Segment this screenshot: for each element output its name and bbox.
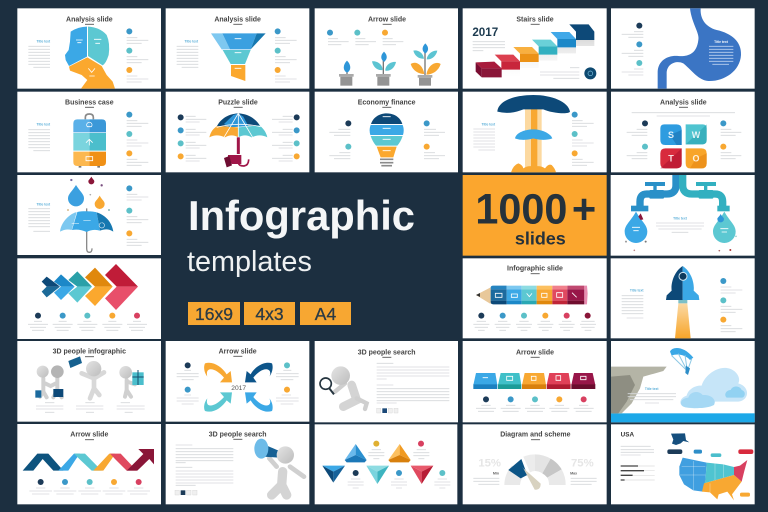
panel: SWOT analysis slide (611, 92, 755, 172)
SWOT chart: S (668, 130, 674, 140)
plus: + (572, 185, 596, 232)
left bullets (178, 114, 206, 161)
panel: diagram and scheme (463, 424, 607, 504)
bullets (622, 23, 643, 75)
format badges: A4 (315, 304, 336, 324)
text block: Title text (185, 39, 199, 43)
panel: puzzle slide (166, 92, 309, 172)
title: Stairs slide (516, 16, 554, 23)
title: 3D people search (358, 349, 416, 356)
subheading: templates: templates (187, 246, 312, 278)
text block: Title text (630, 289, 644, 293)
right bullets (272, 114, 300, 161)
SWOT chart: W (692, 130, 701, 140)
text block (28, 39, 51, 67)
umbrella (60, 208, 113, 252)
panel: mushroom slide (463, 92, 607, 172)
bullets (473, 313, 596, 330)
funnel chart (211, 33, 266, 81)
bullets (177, 362, 299, 404)
bullets (275, 28, 297, 82)
title: Infographic slide (507, 266, 563, 273)
panel: analysis slide head (17, 8, 161, 89)
drops (67, 177, 110, 211)
pagination (377, 408, 398, 413)
center year: 2017 (231, 385, 246, 392)
title: Arrow slide (368, 16, 406, 23)
SWOT chart (660, 124, 707, 168)
panel: parachute and clouds (611, 341, 755, 422)
icon: Alaska (671, 433, 689, 445)
title: Arrow slide (219, 348, 257, 355)
text block: Title text (37, 202, 51, 206)
text block: Title text (714, 40, 729, 44)
title: Puzzle slide (218, 100, 258, 107)
SWOT chart: T (668, 153, 674, 163)
panel: zigzag arrow (17, 424, 161, 504)
panel: pencil infographic (463, 258, 607, 338)
min label: Min (493, 471, 499, 475)
text block (622, 289, 644, 318)
SWOT chart: O (692, 153, 699, 163)
format badges: 16x9 (195, 304, 233, 324)
head chart (65, 27, 115, 89)
icon: blue card (68, 356, 82, 368)
text block (28, 202, 51, 231)
panel: triangles (315, 424, 457, 504)
title: 3D people infographic (53, 349, 126, 356)
text block (621, 446, 654, 455)
panel: 3D people infographic (17, 341, 161, 422)
panel: five tab arrows (463, 341, 607, 422)
bullets (572, 112, 594, 165)
plant small (339, 61, 354, 86)
panel: arrow slide plants (315, 8, 458, 89)
handshake figures (35, 365, 64, 398)
umbrella puzzle (209, 113, 267, 167)
panel: umbrella and drops (17, 175, 161, 255)
left percent: 15% (478, 458, 501, 470)
bottom band (611, 413, 755, 422)
title: Business case (65, 100, 114, 107)
title: Analysis slide (660, 100, 707, 107)
clouds (680, 368, 747, 408)
text block: Title text (482, 123, 496, 127)
plant medium (372, 52, 396, 86)
pagination (175, 490, 197, 495)
intro text (632, 113, 735, 116)
right percent: 75% (571, 458, 594, 470)
format badges: 4x3 (255, 304, 284, 324)
right tap (683, 175, 730, 211)
min label (473, 471, 499, 484)
panel: taps and drops (611, 175, 755, 256)
max label: Max (570, 471, 577, 475)
heading: Infographic: Infographic (188, 192, 415, 239)
text block: Title text (645, 387, 659, 391)
panel: business case (17, 92, 161, 172)
bullets (29, 479, 150, 494)
panel: USA map (611, 424, 755, 504)
panel: stomach slide (611, 8, 755, 89)
arrows chart (204, 363, 273, 412)
drops (625, 212, 737, 251)
zigzag chart (23, 449, 154, 471)
text block (473, 42, 505, 51)
USA map (679, 458, 747, 500)
panel: rocket slide (611, 258, 755, 338)
text block: Title text (37, 123, 51, 127)
panel: 3D people search megaphone (166, 424, 309, 504)
captions (36, 403, 145, 412)
heading: USA (621, 432, 634, 439)
triangles chart (322, 444, 433, 484)
text block (709, 40, 733, 64)
title: Diagram and scheme (500, 432, 571, 439)
figure with magnifier (320, 366, 367, 409)
bullets (327, 30, 403, 45)
pencil chart (476, 286, 588, 304)
max label (570, 471, 597, 484)
text block (176, 445, 233, 485)
legend pills (667, 449, 753, 497)
text block (177, 39, 199, 67)
gift figure (119, 366, 144, 397)
count: 1000 (475, 185, 567, 232)
title: Arrow slide (70, 432, 108, 439)
text block (28, 123, 51, 151)
bullets (627, 120, 741, 159)
bullets (348, 441, 450, 488)
bullets (329, 120, 445, 159)
panel: analysis slide funnel (166, 8, 309, 89)
icon: rocket mushroom (497, 95, 570, 172)
stomach shape (658, 8, 741, 89)
tabs chart (473, 373, 595, 389)
panel: chevron arrows (17, 258, 161, 339)
text block (656, 216, 704, 232)
rock cliff (611, 367, 667, 413)
bullets (126, 28, 148, 82)
text block: Title text (673, 216, 688, 220)
title: Arrow slide (516, 349, 554, 356)
bullets (28, 313, 147, 330)
title: Analysis slide (66, 16, 113, 23)
title: Economy finance (358, 100, 416, 107)
bulb chart (370, 113, 404, 166)
bullets (126, 185, 148, 245)
panel: economy finance (315, 92, 458, 172)
plant large (411, 43, 441, 86)
caption (540, 68, 579, 78)
text block (473, 123, 496, 150)
text block (628, 387, 676, 403)
icon: circle badge (584, 67, 596, 79)
chevron chart (42, 264, 138, 310)
format badges (188, 302, 351, 325)
gauge chart (504, 454, 566, 490)
text block (377, 363, 449, 403)
bullets (126, 112, 148, 165)
year: 2017 (472, 26, 498, 39)
title: Analysis slide (214, 16, 261, 23)
left tap (631, 175, 676, 211)
label: slides (515, 229, 566, 249)
panel: 3D people search magnifier (315, 341, 458, 422)
icon: parachute (670, 348, 693, 375)
bullets (720, 278, 742, 332)
jumping figure (82, 361, 104, 398)
text block: Title text (37, 39, 51, 43)
panel: four arrows 2017 (166, 341, 309, 422)
suitcase chart (73, 114, 106, 168)
title: 3D people search (209, 431, 267, 438)
panel: 1000+ slides callout (463, 175, 607, 256)
figure with megaphone (254, 439, 304, 495)
stairs chart (476, 24, 594, 83)
bullets (476, 396, 594, 411)
panel: stairs slide (463, 8, 607, 89)
icon: rocket (666, 266, 699, 338)
bars (621, 466, 655, 480)
